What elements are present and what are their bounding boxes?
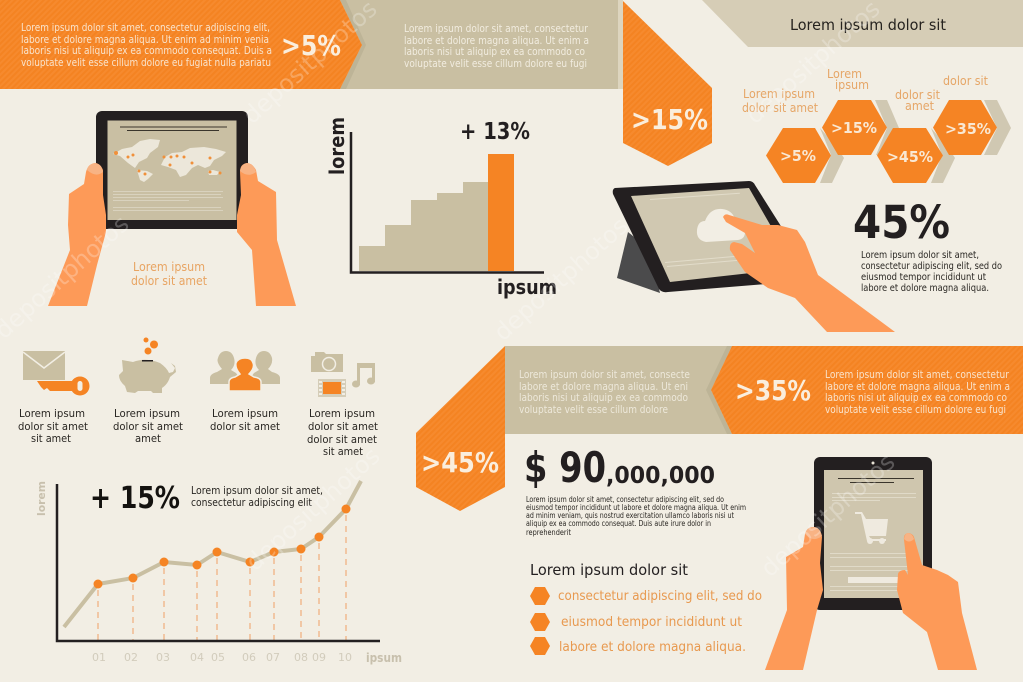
ribbon: >15%: >15% (631, 103, 708, 136)
hexagon >45%: >45% (887, 148, 933, 166)
caption: Lorem ipsum dolor sit amet: Lorem ipsum (133, 260, 205, 274)
tablet on stand with hand touching cloud (613, 181, 895, 332)
text: envelope caption (18, 407, 89, 445)
hexagon labels: dolor sit (943, 74, 988, 88)
stat: $ 90,000,000: aliquip ex ea commodo consequat. Duis aute irure dolor in (526, 518, 711, 528)
line chart +15%: 06 (242, 651, 256, 664)
hexagon >15% (822, 100, 887, 155)
hexagon >35% (933, 100, 997, 155)
stair bar chart +13%: lorem (325, 117, 349, 175)
hexagon labels: amet (905, 99, 934, 113)
text: media caption: dolor sit amet (307, 433, 378, 446)
ribbon: >45%: >45% (421, 446, 499, 479)
line chart +15%: 03 (156, 651, 170, 664)
top band: orange arrow panel: Lorem ipsum dolor sit amet, consectetur adipiscing elit, (21, 22, 270, 34)
stat: $ 90,000,000: eiusmod tempor incididunt ut labore et dolore magna aliqua. Ut enim (526, 502, 746, 512)
stat: 45%: eiusmod tempor incididunt ut (861, 272, 986, 283)
list: Lorem ipsum dolor sit: labore et dolore magna aliqua. (559, 640, 746, 655)
list: Lorem ipsum dolor sit: eiusmod tempor incididunt ut (561, 615, 742, 630)
top band: tan panel: Lorem ipsum dolor sit amet, consectetur (404, 23, 589, 35)
line chart +15%: 08 (294, 651, 308, 664)
hexagon labels: Lorem ipsum (743, 87, 815, 101)
line chart +15%: 02 (124, 651, 138, 664)
left hand (48, 163, 106, 306)
text: envelope caption: sit amet (31, 432, 72, 445)
bottom band: tan panel: voluptate velit esse cillum dolore (519, 404, 668, 416)
list: Lorem ipsum dolor sit: Lorem ipsum dolor sit (530, 561, 688, 579)
watermark: depositphotos (488, 212, 634, 346)
hexagon labels: dolor sit (895, 88, 940, 102)
hexagon labels: dolor sit amet (742, 101, 818, 115)
line chart +15%: 01 (92, 651, 106, 664)
stat: $ 90,000,000: Lorem ipsum dolor sit amet, consectetur adipiscing elit, sed do (526, 494, 724, 504)
top band: orange arrow panel: >5% (281, 29, 341, 62)
watermark (0, 0, 901, 582)
heading banner: Lorem ipsum dolor sit (702, 0, 1023, 47)
text: media caption: sit amet (323, 445, 364, 458)
text: people caption: Lorem ipsum (212, 407, 278, 420)
hexagon labels: ipsum (835, 78, 869, 92)
stat: 45%: 45% (853, 196, 950, 249)
top band: tan panel: labore et dolore magna aliqua. Ut enim a (404, 35, 589, 47)
stair bar chart +13%: ipsum (497, 275, 557, 299)
stat: $ 90,000,000: ad minim veniam, quis nostrud exercitation ullamco laboris nisi ut (526, 510, 735, 520)
heading banner: Lorem ipsum dolor sit: Lorem ipsum dolor sit (790, 16, 946, 34)
tablet screen (108, 120, 236, 220)
text: piggy caption (113, 407, 184, 445)
hexagon chain (742, 67, 1011, 183)
left hand (765, 527, 823, 670)
caption: Lorem ipsum dolor sit amet: dolor sit amet (131, 274, 207, 288)
text: people caption (210, 407, 281, 433)
line chart +15%: consectetur adipiscing elit (191, 497, 312, 509)
top band: tan panel: laboris nisi ut aliquip ex ea commodo co (404, 46, 585, 58)
line chart +15%: lorem (35, 481, 48, 516)
stat: 45%: labore et dolore magna aliqua. (861, 283, 989, 294)
tablet held in two hands with world map (48, 111, 296, 306)
icon: piggy bank with coins (119, 338, 176, 393)
bottom band: orange arrow panel (711, 346, 1023, 434)
icon: group of people (210, 351, 280, 391)
hexagon >45% (877, 128, 943, 183)
line chart +15%: + 15% (90, 481, 180, 516)
bottom band: tan panel (505, 346, 732, 434)
top band: orange arrow panel: voluptate velit esse cillum dolore eu fugiat nulla pariatu (21, 57, 271, 69)
pointing hand (723, 214, 895, 332)
top band: orange arrow panel: labore et dolore magna aliqua. Ut enim ad minim venia (21, 34, 269, 46)
caption: Lorem ipsum dolor sit amet (131, 260, 207, 288)
icon: envelope and key (23, 351, 90, 396)
ribbon: >45% (416, 346, 505, 511)
text: media caption (307, 407, 379, 458)
line chart +15%: 10 (338, 651, 352, 664)
hexagon >35%: >35% (945, 120, 991, 138)
bottom band: tan panel: Lorem ipsum dolor sit amet, consecte (519, 369, 690, 381)
stair bar chart +13% (325, 117, 557, 299)
icon: shopping cart (855, 512, 888, 544)
icon: camera, film and music note (311, 352, 375, 397)
line chart +15%: 04 (190, 651, 204, 664)
line chart +15%: ipsum (366, 651, 402, 665)
text: piggy caption: amet (135, 432, 162, 445)
hexagon labels: Lorem (827, 67, 862, 81)
text: envelope caption: Lorem ipsum (19, 407, 85, 420)
icon: cloud (697, 209, 745, 242)
stat: $ 90,000,000: $ 90 (524, 443, 606, 492)
text: media caption: Lorem ipsum (309, 407, 375, 420)
bottom band: tan panel: labore et dolore magna aliqua. Ut eni (519, 381, 688, 393)
tablet with shopping cart held by hands (765, 457, 977, 670)
top band: orange arrow panel: laboris nisi ut aliquip ex ea commodo consequat. Duis a (21, 45, 272, 57)
stat: 45%: Lorem ipsum dolor sit amet, (861, 250, 979, 261)
stat: $ 90,000,000 (524, 443, 746, 537)
text: people caption: dolor sit amet (210, 420, 281, 433)
line chart +15%: Lorem ipsum dolor sit amet, (191, 485, 323, 497)
hexagon >5%: >5% (780, 147, 816, 165)
top band: tan panel: voluptate velit esse cillum dolore eu fugi (404, 58, 587, 70)
right hand (237, 163, 296, 306)
stair bar chart +13%: + 13% (460, 119, 530, 145)
hexagon labels (742, 67, 988, 115)
list: Lorem ipsum dolor sit (530, 561, 762, 655)
text: piggy caption: Lorem ipsum (114, 407, 180, 420)
line chart +15%: 09 (312, 651, 326, 664)
stat: $ 90,000,000: reprehenderit (526, 527, 572, 537)
line chart +15%: 05 (211, 651, 225, 664)
text: media caption: dolor sit amet (308, 420, 379, 433)
ribbon: >15% (618, 0, 712, 166)
text: piggy caption: dolor sit amet (113, 420, 184, 433)
stat: $ 90,000,000: ,000,000 (606, 463, 715, 489)
line chart +15% (35, 481, 402, 665)
stat: 45% (853, 196, 1002, 294)
top band: tan panel (340, 0, 622, 89)
watermark: depositphotos (240, 442, 386, 576)
right hand (897, 533, 977, 670)
text: envelope caption: dolor sit amet (18, 420, 89, 433)
hexagon >15%: >15% (831, 119, 877, 137)
watermark: depositphotos (755, 448, 901, 582)
line chart +15%: 07 (266, 651, 280, 664)
bottom band: orange arrow panel: >35% (735, 374, 811, 407)
hexagon >5% (766, 128, 831, 183)
bottom band: tan panel: laboris nisi ut aliquip ex ea commodo (519, 392, 688, 404)
list: Lorem ipsum dolor sit: consectetur adipiscing elit, sed do (558, 589, 762, 604)
top band: orange arrow panel (0, 0, 362, 89)
